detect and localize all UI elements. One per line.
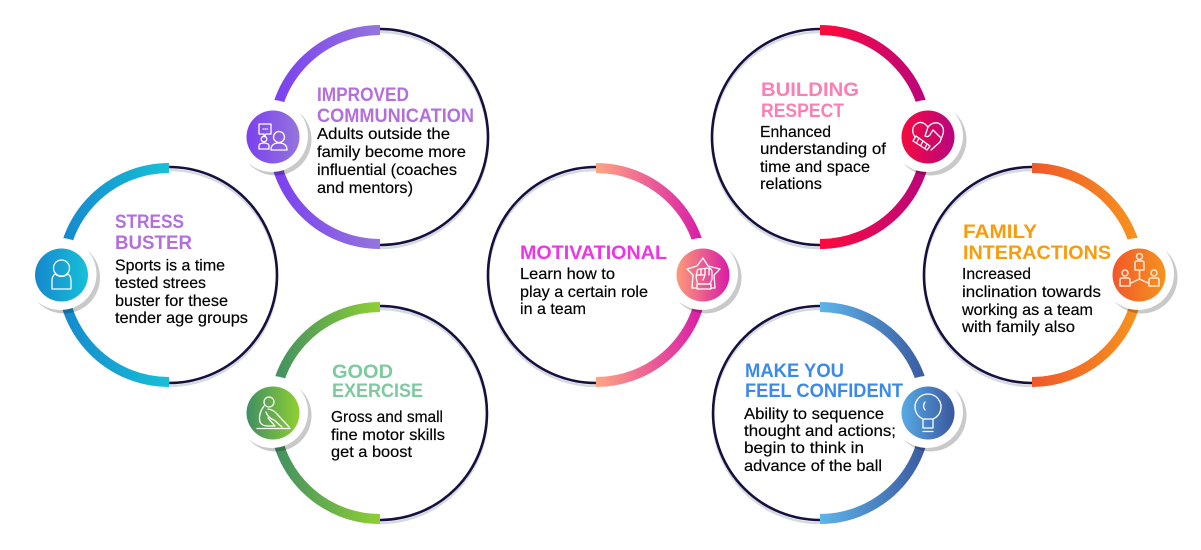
icon: heart handshake	[891, 100, 966, 176]
text: improved communication description: and mentors)	[317, 180, 413, 197]
ring: family interactions	[924, 167, 1139, 386]
text: make you feel confident description: thought and actions;	[744, 423, 896, 440]
heading: motivational: MOTIVATIONAL	[520, 243, 667, 264]
text: make you feel confident description: begin to think in	[744, 440, 864, 457]
text: building respect description: relations	[760, 176, 822, 193]
icon: people talking	[236, 100, 312, 176]
text: building respect description: Enhanced	[760, 124, 831, 141]
text: motivational description: Learn how to	[520, 266, 615, 283]
text: make you feel confident description: Ability to sequence	[744, 406, 884, 423]
text: improved communication description: influential (coaches	[317, 162, 457, 179]
ring: building respect	[712, 29, 927, 248]
ring: stress buster	[62, 167, 277, 386]
text: good exercise description: get a boost	[331, 444, 413, 461]
panel: improved communication	[236, 29, 488, 248]
text: stress buster description: Sports is a time	[115, 258, 225, 274]
text: family interactions description: inclination towards	[962, 284, 1101, 301]
heading: building respect: RESPECT	[761, 101, 844, 122]
icon: light bulb	[891, 376, 966, 452]
text: motivational description: play a certain role	[520, 284, 648, 301]
panel: make you feel confident	[713, 306, 966, 523]
icon: seated athlete	[236, 376, 312, 452]
heading: good exercise: GOOD	[332, 362, 393, 383]
heading: make you feel confident: MAKE YOU	[745, 361, 844, 382]
panel: motivational	[488, 167, 742, 386]
heading: good exercise: EXERCISE	[332, 381, 423, 402]
heading: improved communication: COMMUNICATION	[317, 106, 474, 127]
heading: stress buster: BUSTER	[115, 233, 192, 254]
text: stress buster description: buster for these	[115, 293, 228, 310]
ring: make you feel confident	[713, 306, 926, 523]
icon: person	[24, 238, 100, 314]
heading: make you feel confident: FEEL CONFIDENT	[745, 381, 903, 402]
text: good exercise description: Gross and small	[331, 409, 443, 426]
text: improved communication description: Adults outside the	[317, 126, 450, 143]
panel: stress buster	[24, 167, 277, 386]
text: family interactions description: with family also	[961, 319, 1075, 336]
panel: good exercise	[236, 306, 487, 523]
heading: improved communication: IMPROVED	[317, 85, 409, 106]
heading: family interactions: INTERACTIONS	[963, 243, 1111, 264]
ring: motivational	[488, 167, 703, 386]
text: stress buster description: tested strees	[115, 275, 206, 292]
text: make you feel confident description: advance of the ball	[744, 458, 882, 475]
text: building respect description: time and space	[760, 159, 870, 176]
text: good exercise description: fine motor skills	[331, 427, 445, 444]
text: building respect description: understanding of	[760, 141, 887, 158]
icon: family network	[1102, 238, 1178, 314]
heading: stress buster: STRESS	[115, 212, 184, 233]
text: stress buster description: tender age groups	[115, 310, 248, 327]
text: family interactions description: Increased	[962, 266, 1031, 283]
ring: good exercise	[274, 306, 487, 523]
text: family interactions description: working as a team	[961, 302, 1093, 319]
heading: family interactions: FAMILY	[963, 222, 1037, 243]
text: improved communication description: family become more	[317, 144, 466, 161]
icon: fist in star	[666, 238, 742, 314]
ring: improved communication	[273, 29, 488, 248]
panel: family interactions	[924, 167, 1178, 386]
heading: building respect: BUILDING	[761, 80, 859, 101]
text: motivational description: in a team	[520, 301, 586, 318]
panel: building respect	[712, 29, 966, 248]
